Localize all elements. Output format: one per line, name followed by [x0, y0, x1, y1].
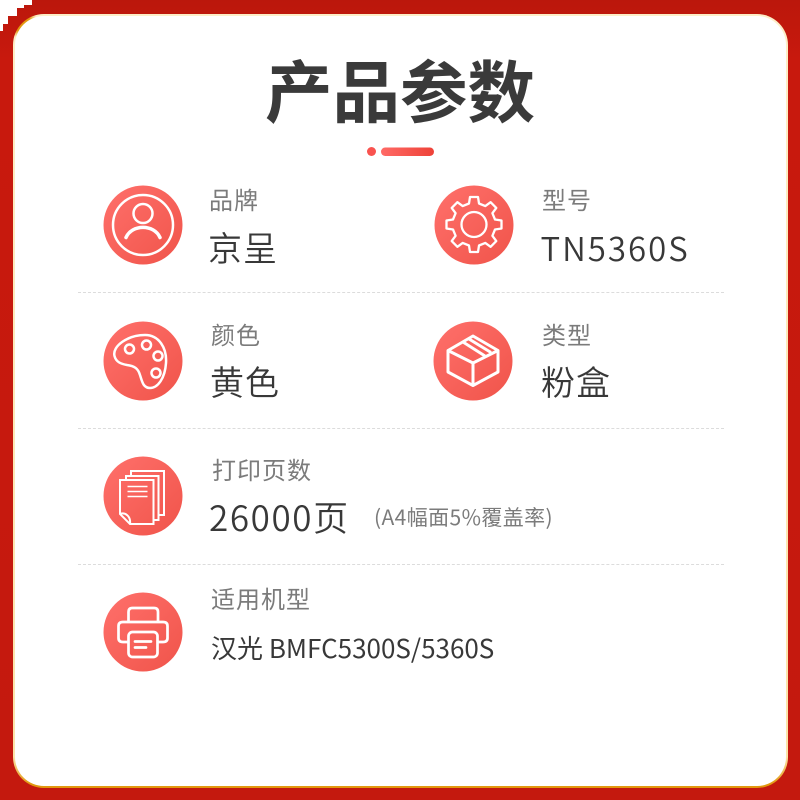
icon: model gear	[434, 186, 514, 264]
note: coverage: (A4幅面5%覆盖率)	[374, 502, 553, 532]
divider	[78, 292, 724, 293]
label: compatible models: 适用机型	[211, 580, 311, 615]
label: type: 类型	[542, 316, 592, 351]
label: page yield: 打印页数	[212, 451, 312, 486]
label: colour: 颜色	[211, 316, 261, 351]
value: model: TN5360S	[540, 223, 690, 271]
title accent: dot and bar	[367, 147, 434, 156]
value: colour: 黄色	[210, 356, 280, 405]
label: model: 型号	[542, 181, 592, 216]
label: brand: 品牌	[209, 181, 259, 216]
value: page yield: 26000页	[209, 490, 350, 542]
icon: printer	[104, 592, 182, 672]
value: type: 粉盒	[541, 356, 611, 405]
divider	[78, 428, 724, 429]
title: 产品参数	[265, 40, 535, 136]
icon: box	[434, 322, 512, 400]
icon: brand person	[104, 186, 182, 264]
value: compatible models: 汉光 BMFC5300S/5360S	[211, 629, 494, 666]
icon: stacked pages	[104, 456, 182, 536]
value: brand: 京呈	[208, 222, 278, 271]
divider	[78, 564, 724, 565]
icon: colour palette	[104, 322, 182, 400]
